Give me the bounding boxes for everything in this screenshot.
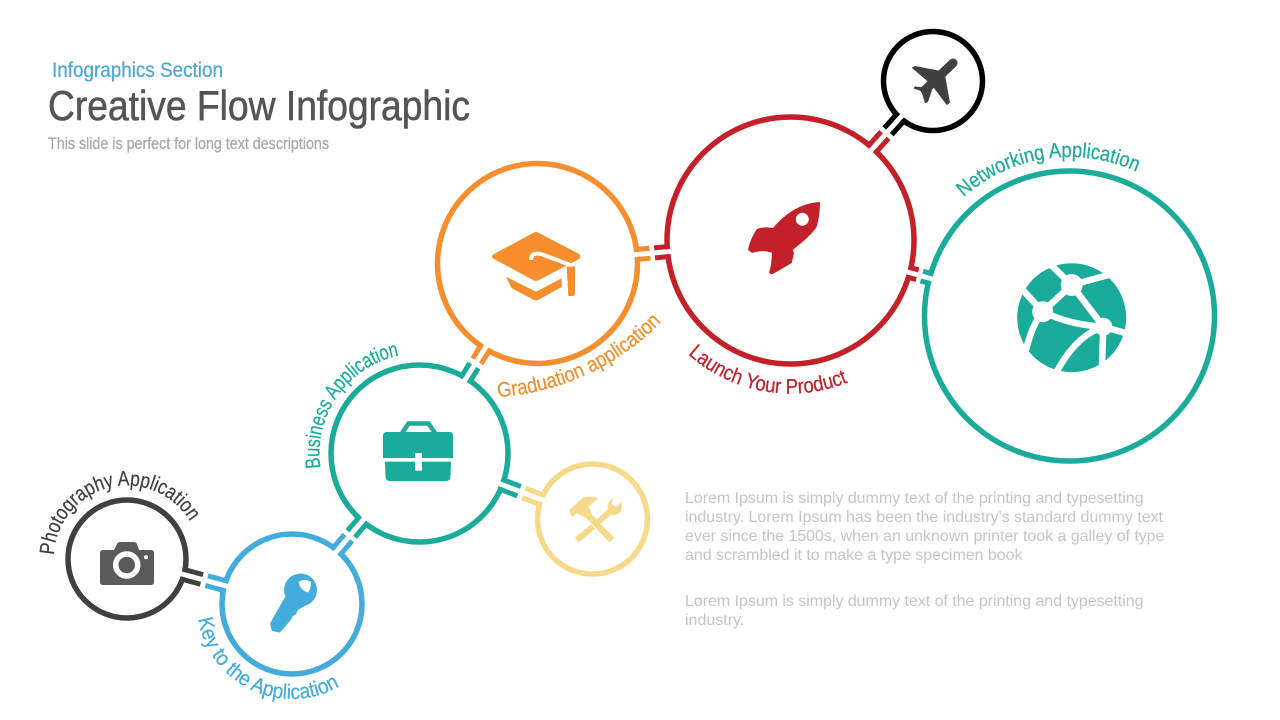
icon: camera	[100, 542, 154, 585]
text block: first paragraph	[685, 490, 1165, 564]
connector: key to photography	[205, 576, 230, 591]
text block: first paragraph: and scrambled it to make a type specimen book	[685, 547, 1024, 564]
node: tools	[522, 464, 648, 574]
icon: briefcase	[383, 424, 453, 481]
label: photography application: Photography Application	[40, 470, 198, 554]
icon: globe	[1017, 263, 1129, 375]
node: launch	[654, 114, 920, 394]
title: Creative Flow Infographic	[48, 82, 470, 129]
text block: second paragraph: industry.	[685, 612, 744, 629]
header	[48, 59, 470, 153]
connector: key to business	[331, 534, 352, 557]
node: plane	[884, 32, 982, 135]
label: business application: Business Application	[305, 345, 398, 468]
label: networking application: Networking Application	[955, 142, 1140, 196]
connector: graduation to business	[473, 342, 491, 364]
connector: business to tools	[497, 479, 521, 496]
connector: launch to plane	[867, 132, 889, 154]
connector: business to graduation	[460, 363, 478, 384]
icon: graduation cap	[492, 232, 580, 300]
connector: networking to launch	[920, 271, 935, 284]
connector: plane to launch	[884, 112, 906, 135]
icon: key	[270, 574, 317, 632]
connector: tools to business	[522, 488, 547, 506]
text block: first paragraph: industry. Lorem Ipsum has been the industry's standard dummy text	[685, 509, 1164, 526]
section label: Infographics Section	[52, 59, 223, 82]
text block: first paragraph: ever since the 1500s, when an unknown printer took a galley of type	[685, 528, 1165, 545]
connector: launch to graduation	[654, 246, 671, 258]
connector: business to key	[347, 515, 368, 537]
node: key	[198, 531, 365, 702]
node: networking	[920, 142, 1218, 464]
subtitle: This slide is perfect for long text descriptions	[48, 134, 329, 153]
node: graduation	[434, 160, 661, 397]
text block: second paragraph	[685, 593, 1144, 629]
node: business	[305, 345, 522, 545]
label: graduation application: Graduation application	[498, 316, 661, 397]
icon: hammer and wrench	[569, 497, 622, 540]
text block: second paragraph: Lorem Ipsum is simply dummy text of the printing and typesetting	[685, 593, 1144, 610]
text block: first paragraph: Lorem Ipsum is simply dummy text of the printing and typesetting	[685, 490, 1144, 507]
node: photography	[40, 470, 204, 621]
label: launch your product: Launch Your Product	[688, 344, 848, 394]
connector: graduation to launch	[633, 248, 650, 260]
icon: airplane	[912, 63, 953, 105]
connector: launch to networking	[905, 267, 919, 280]
connector: photography to key	[179, 569, 203, 584]
icon: rocket	[748, 202, 820, 274]
label: key to the application: Key to the Application	[198, 617, 339, 702]
